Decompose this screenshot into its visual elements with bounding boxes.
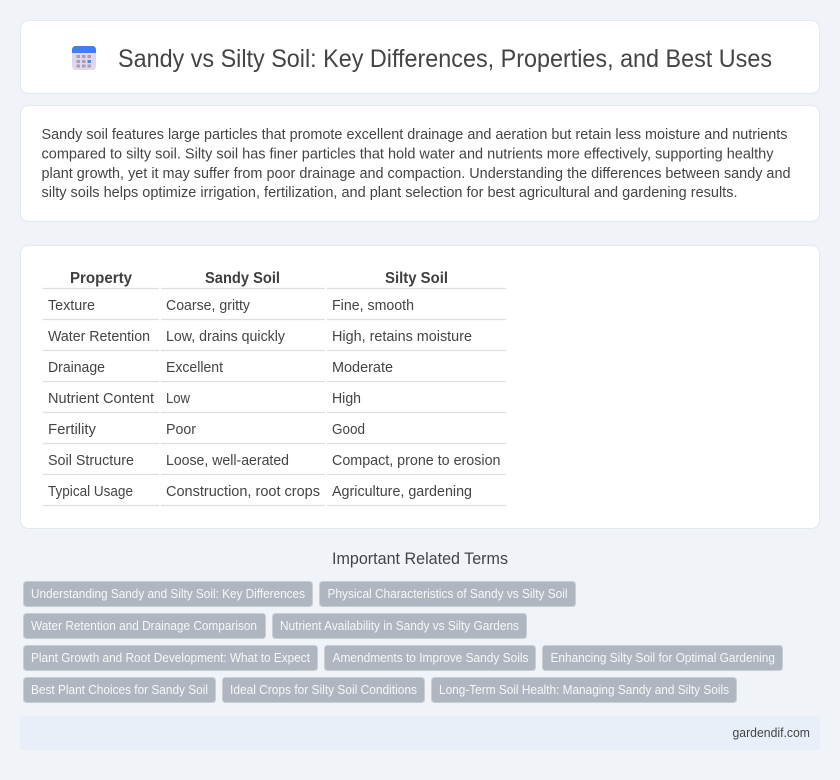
panel: introduction: [20, 106, 820, 222]
row: soil structure: Loose, well-aerated: [166, 453, 289, 469]
tag: Ideal Crops for Silty Soil Conditions: [230, 683, 417, 697]
tag: Understanding Sandy and Silty Soil: Key Differences: [31, 587, 305, 601]
intro text: silty soils helps optimize irrigation, fertilization, and plant selection for best agricultural and gardening results.: [42, 185, 738, 201]
panel: header: [20, 20, 820, 94]
tag: Enhancing Silty Soil for Optimal Gardening: [550, 651, 775, 665]
row: water retention: Water Retention: [48, 329, 150, 345]
tag: Amendments to Improve Sandy Soils: [332, 651, 528, 665]
intro text: compared to silty soil. Silty soil has finer particles that hold water and nutrients more effectively, supporting healthy: [42, 146, 774, 162]
footer: [20, 716, 820, 750]
panel: related terms tags: [24, 582, 782, 702]
tag: [324, 646, 536, 670]
row: fertility: Good: [332, 422, 365, 438]
row: fertility: [43, 422, 506, 444]
row: water retention: [43, 329, 506, 350]
tag: [542, 646, 782, 670]
row: nutrient content: Low: [166, 391, 190, 407]
row: soil structure: Compact, prone to erosion: [332, 453, 500, 469]
tag: [24, 678, 216, 702]
intro text: plant growth, yet it may suffer from poor drainage and compaction. Understanding the differences between sandy and: [42, 166, 790, 182]
tag: [24, 582, 312, 606]
tag: Nutrient Availability in Sandy vs Silty Gardens: [280, 619, 519, 633]
table header: Silty Soil: [385, 270, 448, 287]
row: drainage: Moderate: [332, 360, 393, 376]
tag: [320, 582, 576, 606]
row: nutrient content: Nutrient Content: [48, 391, 154, 407]
tag: [222, 678, 424, 702]
row: texture: [43, 298, 506, 320]
intro text: Sandy soil features large particles that promote excellent drainage and aeration but retain less moisture and nutrients: [42, 127, 788, 143]
row: nutrient content: High: [332, 391, 361, 407]
row: texture: Texture: [48, 298, 95, 314]
row: water retention: High, retains moisture: [332, 329, 472, 345]
row: water retention: Low, drains quickly: [166, 329, 286, 345]
table header: Sandy Soil: [205, 270, 280, 287]
row: drainage: Excellent: [166, 360, 223, 376]
row: fertility: Poor: [166, 422, 196, 438]
row: texture: Coarse, gritty: [166, 298, 251, 314]
tag: Physical Characteristics of Sandy vs Silty Soil: [328, 587, 568, 601]
row: fertility: Fertility: [48, 422, 97, 438]
panel: comparison table: [20, 246, 820, 528]
row: typical usage: Construction, root crops: [166, 484, 320, 500]
icon: calendar: [72, 46, 96, 70]
tag: [24, 646, 318, 670]
table header: Property: [70, 270, 132, 287]
row: typical usage: Agriculture, gardening: [332, 484, 472, 500]
row: soil structure: [43, 453, 506, 474]
tag: Long-Term Soil Health: Managing Sandy and Silty Soils: [439, 683, 729, 697]
tag: Water Retention and Drainage Comparison: [31, 619, 257, 633]
tag: Best Plant Choices for Sandy Soil: [31, 683, 208, 697]
tag: [272, 614, 526, 638]
heading: important related terms: Important Related Terms: [332, 550, 508, 568]
tag: [24, 614, 266, 638]
row: typical usage: Typical Usage: [48, 484, 133, 500]
footer: gardendif.com: [732, 725, 810, 740]
intro text: [42, 127, 790, 201]
table header: [43, 270, 506, 288]
row: texture: Fine, smooth: [332, 298, 414, 314]
row: nutrient content: [43, 391, 506, 412]
row: soil structure: Soil Structure: [48, 453, 134, 469]
title: Sandy vs Silty Soil: Key Differences, Properties, and Best Uses: [118, 46, 772, 73]
tag: [432, 678, 736, 702]
row: drainage: [43, 360, 506, 382]
row: drainage: Drainage: [48, 360, 105, 376]
tag: Plant Growth and Root Development: What to Expect: [31, 651, 310, 665]
row: typical usage: [43, 484, 506, 506]
